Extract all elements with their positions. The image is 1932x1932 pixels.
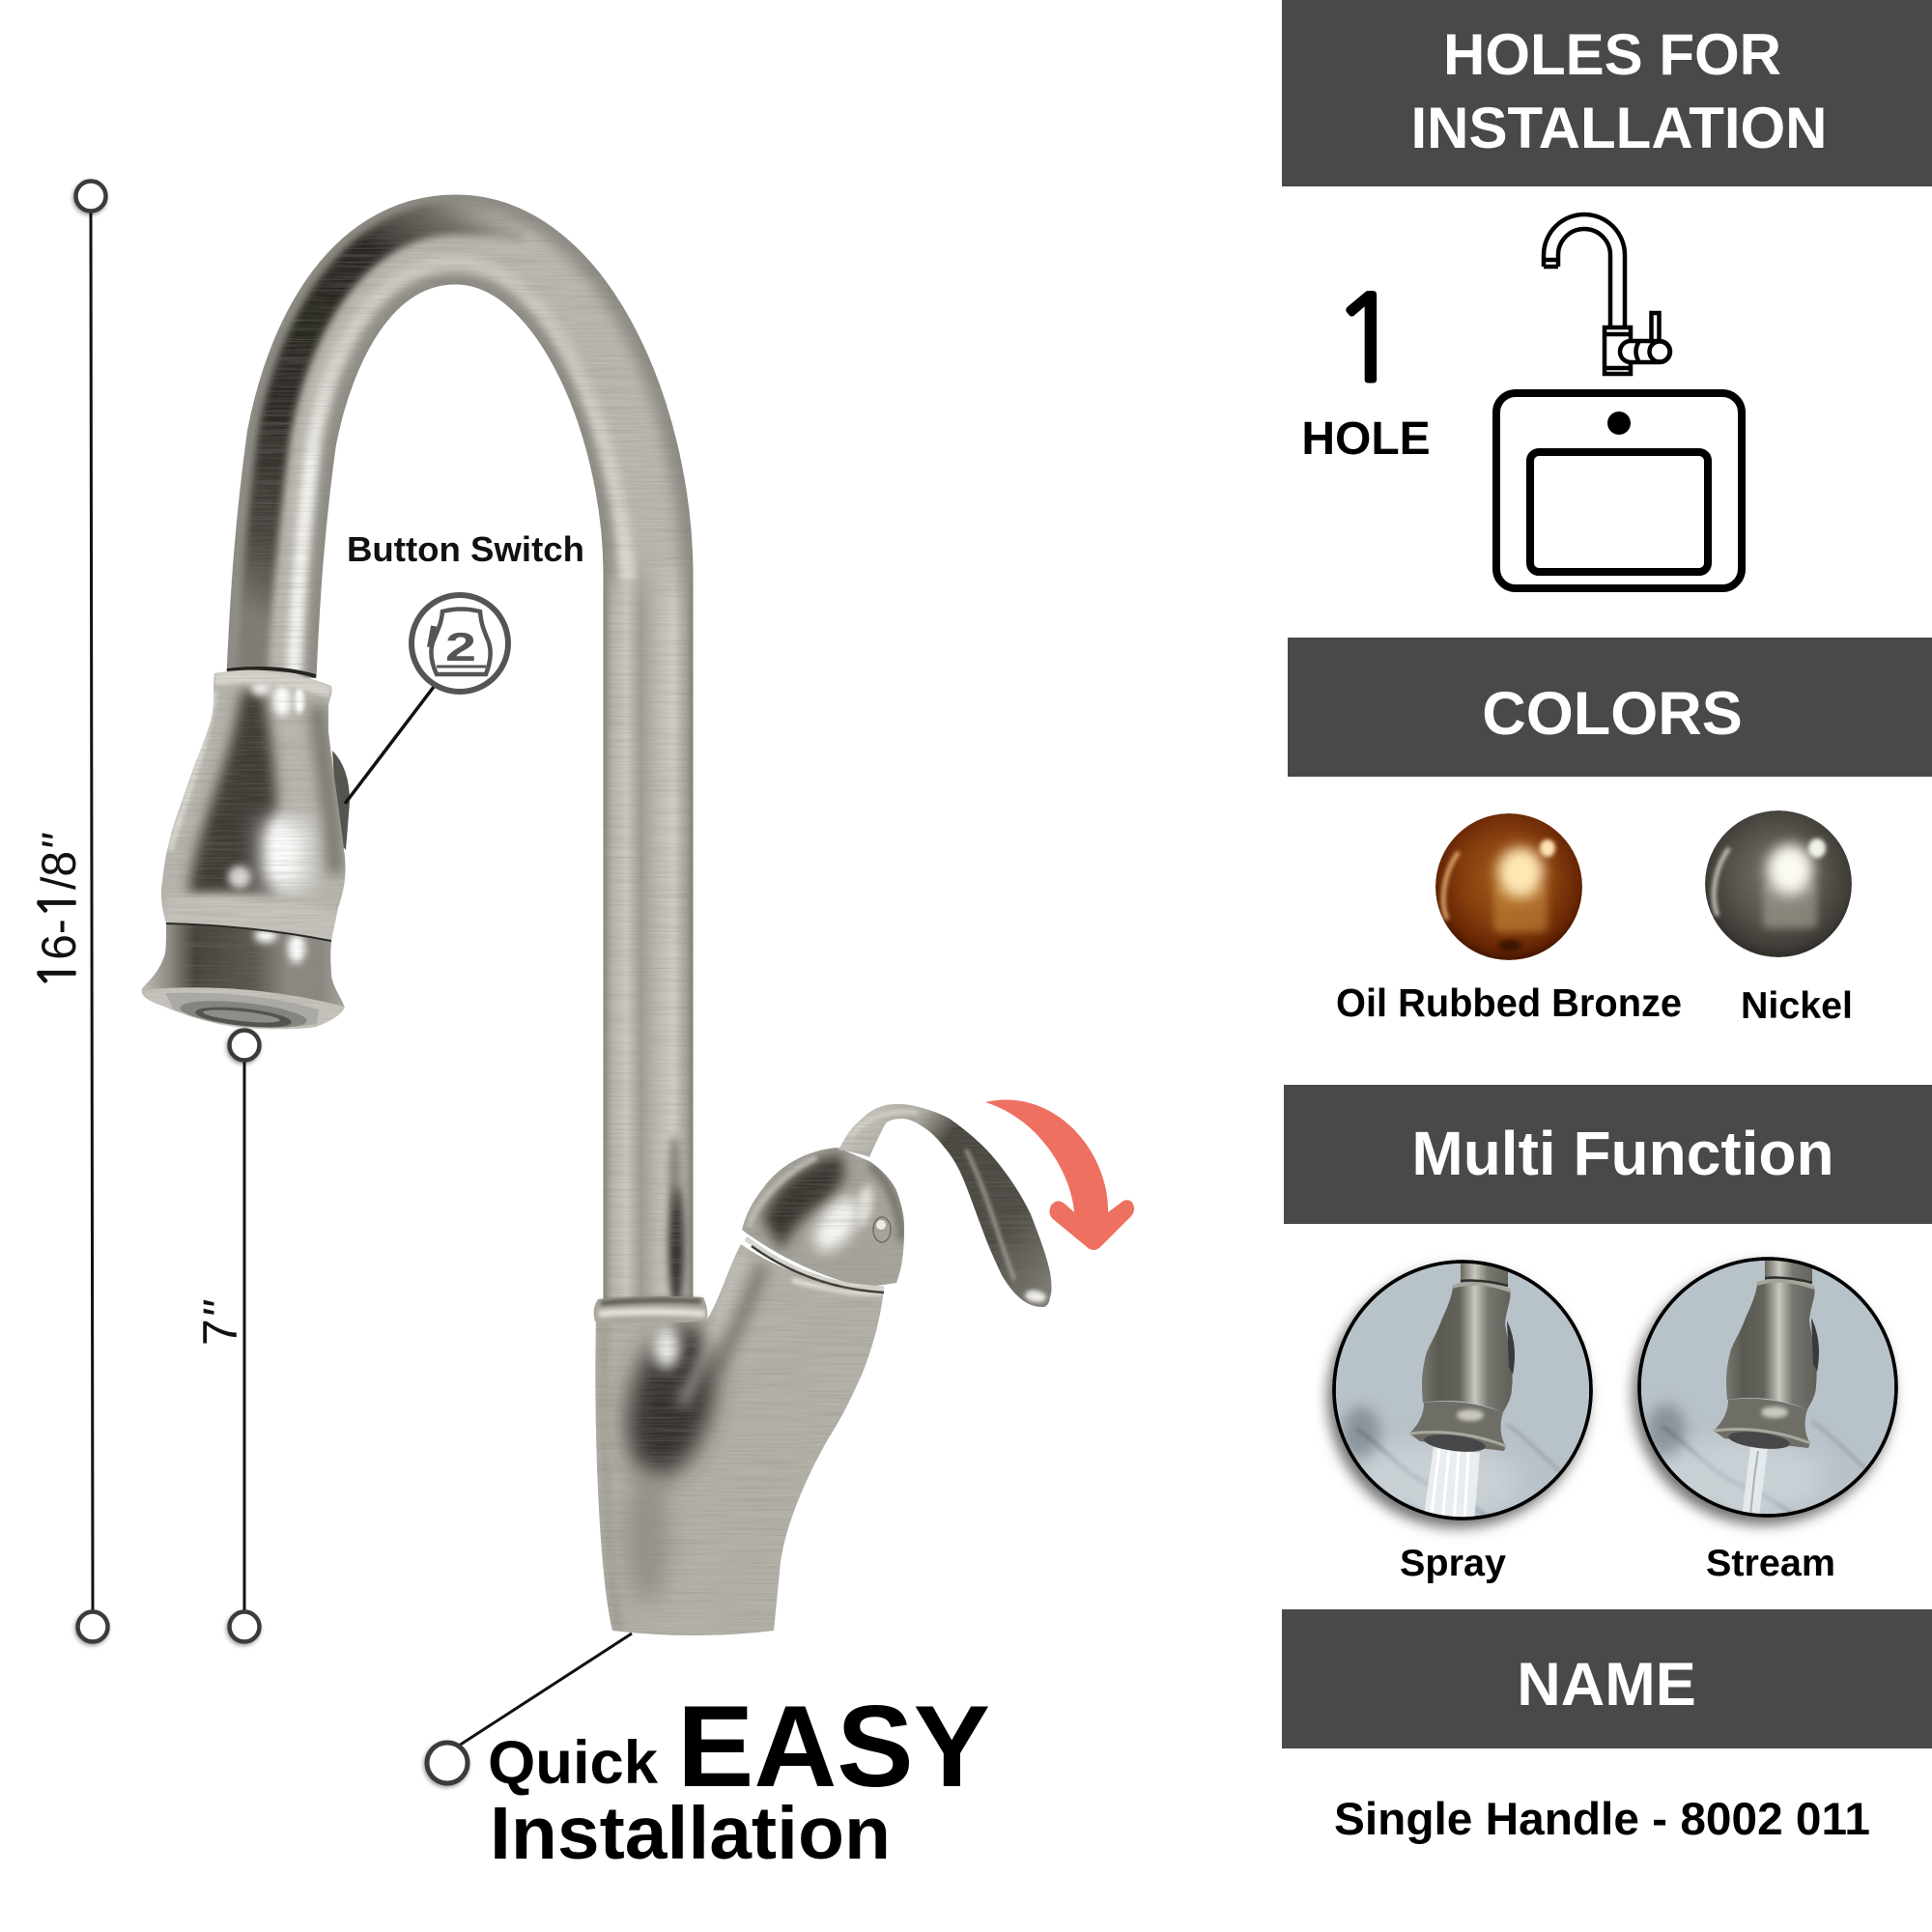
panel: name [1282,1609,1932,1844]
heading bar [1282,0,1932,186]
arrow: handle pull direction [985,1100,1134,1250]
label: spray: Spray [1400,1543,1506,1584]
function: spray [1334,1246,1591,1574]
callout: button switch [345,529,584,804]
callout: quick easy installation [427,1634,990,1875]
faucet body [595,1244,884,1635]
panel: holes for installation [1282,0,1932,588]
callout: quick easy installation: Quick [488,1729,659,1797]
faucet product illustration [135,218,1051,1635]
panel: holes for installation: HOLES FOR [1443,22,1781,87]
label: nickel: Nickel [1741,985,1853,1027]
base collar [594,1296,707,1323]
product name: Single Handle - 8002 011 [1334,1793,1870,1844]
swatch: oil rubbed bronze [1435,813,1582,960]
callout: button switch: Button Switch [347,529,584,569]
swatch: nickel [1705,810,1852,957]
panel: multi function: Multi Function [1411,1119,1834,1188]
spout tube [251,218,694,1333]
dimension: spout clearance 7 inches: 7" [193,1299,247,1346]
leader line [345,687,434,804]
heading bar [1282,1609,1932,1748]
function: stream [1639,1243,1896,1571]
top marker [75,182,106,211]
hole count: 1 [1331,279,1403,398]
hole count: HOLE [1301,413,1431,465]
heading bar [1284,1085,1932,1224]
aerator [165,993,319,1033]
handle dome cap [742,1148,904,1293]
label: bronze: Oil Rubbed Bronze [1336,980,1682,1025]
panel: name: NAME [1517,1651,1696,1719]
dimension: total height 16-1/8 [32,182,108,1642]
icon: spray head number 2: 2 [445,624,476,669]
panel: colors [1288,638,1932,1027]
icon: spray head number 2 [412,595,508,692]
dimension: total height 16-1/8: 16-1/8" [32,833,86,989]
side pin [873,1217,891,1242]
label: stream: Stream [1706,1543,1835,1584]
callout: quick easy installation: Installation [490,1792,891,1875]
panel: multi function [1284,1085,1932,1584]
top marker [230,1030,259,1061]
callout: quick easy installation: EASY [677,1682,990,1811]
dimension: spout clearance 7 inches [193,1030,259,1642]
panel: colors: COLORS [1482,680,1743,748]
panel: holes for installation: INSTALLATION [1410,96,1828,160]
heading bar [1288,638,1932,777]
lever handle [838,1104,1051,1307]
hole count [1301,279,1431,465]
pull-down spray head [135,667,353,1034]
marker [427,1743,468,1783]
icon: sink with one hole [1496,393,1742,588]
icon: faucet [1544,214,1670,374]
